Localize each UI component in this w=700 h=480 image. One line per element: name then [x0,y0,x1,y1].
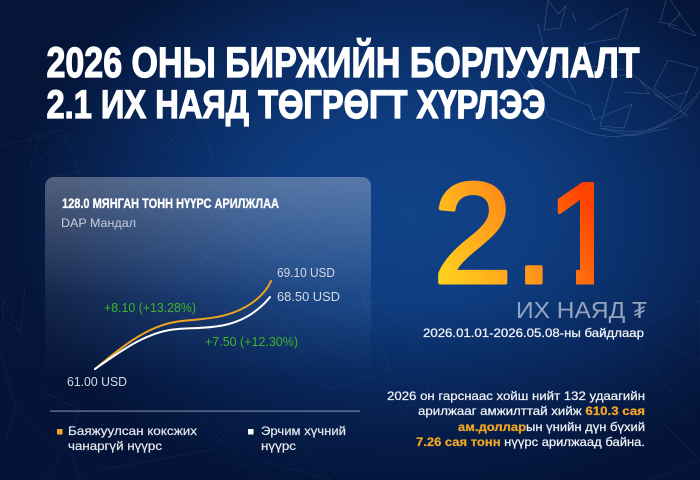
legend: white [248,424,346,453]
summary text: ам.доллар ын үнийн дүн бүхий [458,420,645,434]
legend: orange: чанаргүй нүүрс [68,439,162,453]
value label: 68.50: 68.50 USD [277,289,340,304]
legend: orange: Баяжуулсан коксжих [68,424,197,438]
legend: white: Эрчим хүчний [261,424,346,438]
panel heading: 128.0 МЯНГАН ТОНН НҮҮРС АРИЛЖЛАА [62,196,279,211]
big number: 2.1 [433,154,626,314]
legend: white: нүүрс [261,439,296,453]
summary text: 7.26 сая тонн нүүрс арилжаад байна. [416,435,645,449]
unit label: ИХ НАЯД ₮ [516,297,647,323]
summary text [387,389,645,449]
line: white series [95,297,270,369]
panel: price chart [45,177,371,447]
summary text: арилжааг амжилттай хийж 610.3 сая [418,404,645,418]
value label: 61.00: 61.00 USD [67,374,127,389]
value label: 69.10: 69.10 USD [277,265,335,280]
title: 2.1 ИХ НАЯД ТӨГРӨГТ ХҮРЛЭЭ [46,83,546,127]
summary text: 2026 он гарснаас хойш нийт 132 удаагийн [387,389,645,403]
change label: white: +7.50 (+12.30%) [205,334,298,349]
line: orange series [95,281,271,369]
change label: orange: +8.10 (+13.28%) [104,300,196,315]
panel subheading: DAP Мандал [61,216,136,230]
legend: orange [57,424,197,453]
date range: 2026.01.01-2026.05.08-ны байдлаар [423,326,644,340]
title [46,38,640,127]
